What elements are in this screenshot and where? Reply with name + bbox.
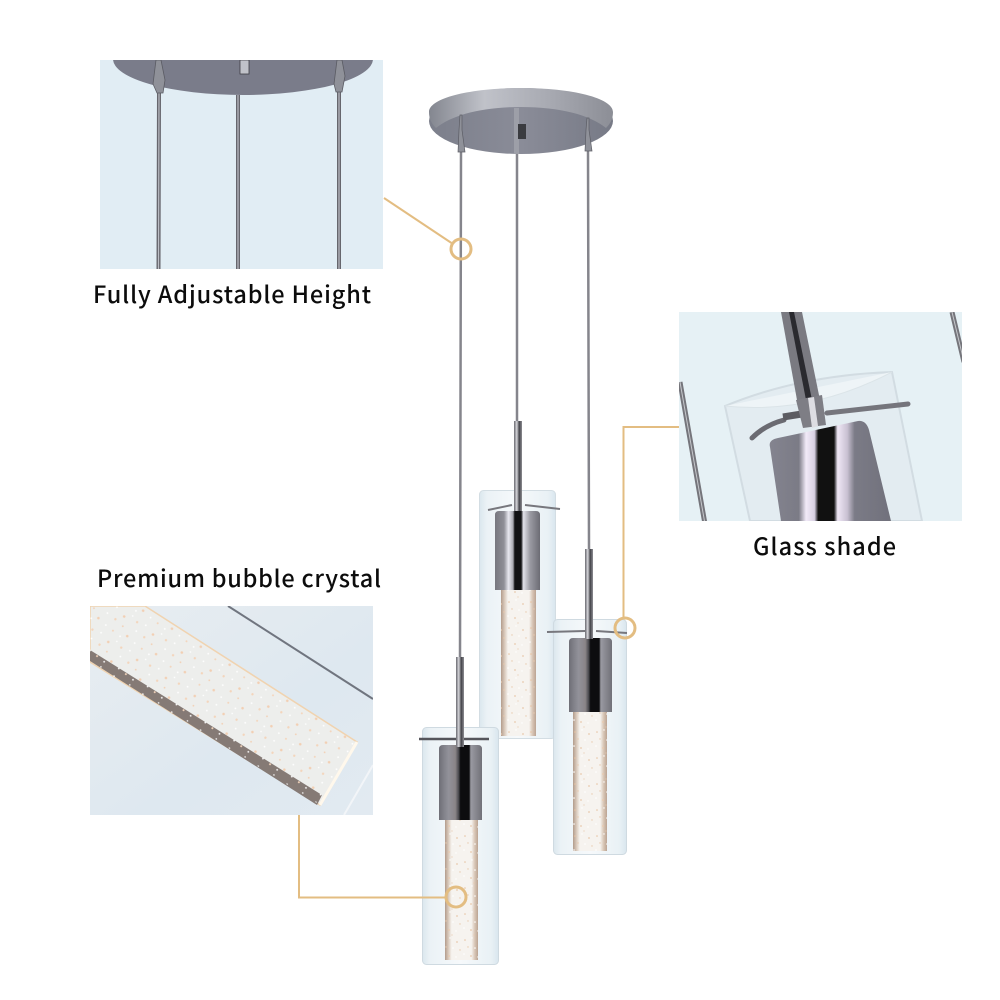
left glass shade xyxy=(422,728,498,964)
right pendant xyxy=(547,549,627,854)
tilted glass cylinder xyxy=(725,372,922,521)
mounting bracket xyxy=(752,420,784,438)
center crystal xyxy=(501,590,536,736)
canopy close-up xyxy=(113,60,373,95)
right crystal xyxy=(573,712,607,851)
left stem xyxy=(456,657,464,747)
callout: glass shade xyxy=(615,427,679,638)
left metal cup xyxy=(439,745,482,820)
central stem xyxy=(781,312,820,400)
panel: bubble crystal detail xyxy=(90,606,373,815)
center stem xyxy=(514,421,522,511)
bubbles xyxy=(90,606,357,805)
right metal cup xyxy=(569,638,612,712)
heading: fully adjustable height: Fully Adjustable Height xyxy=(93,276,371,310)
infographic canvas xyxy=(90,60,962,965)
center pendant xyxy=(480,421,560,738)
callout ring: wire xyxy=(451,239,471,259)
left crystal xyxy=(445,820,478,960)
center bracket xyxy=(488,505,560,510)
canopy fittings xyxy=(458,115,465,152)
caption: glass shade: Glass shade xyxy=(753,528,896,562)
left bracket xyxy=(419,738,489,740)
neighbouring rods xyxy=(680,312,964,524)
suspension wires close-up xyxy=(153,60,345,269)
callout ring: shade xyxy=(615,618,635,638)
callout ring: crystal xyxy=(446,887,466,907)
right stem xyxy=(585,549,593,639)
right bracket xyxy=(547,631,627,633)
left pendant xyxy=(419,657,498,964)
callout: crystal xyxy=(299,815,466,907)
center glass shade xyxy=(480,490,556,738)
right glass shade xyxy=(554,620,626,854)
suspension wires xyxy=(460,150,589,657)
panel: glass shade detail xyxy=(679,312,964,524)
smoked inner cup xyxy=(770,421,891,521)
center metal cup xyxy=(495,511,540,590)
pendant light product xyxy=(419,88,627,964)
crystal rod xyxy=(90,606,357,805)
heading: premium bubble crystal: Premium bubble crystal xyxy=(97,560,381,594)
panel: fully adjustable height detail xyxy=(100,60,383,269)
ceiling canopy xyxy=(429,88,613,154)
dark reflective strip xyxy=(90,650,322,805)
callout: wire height xyxy=(384,198,471,259)
